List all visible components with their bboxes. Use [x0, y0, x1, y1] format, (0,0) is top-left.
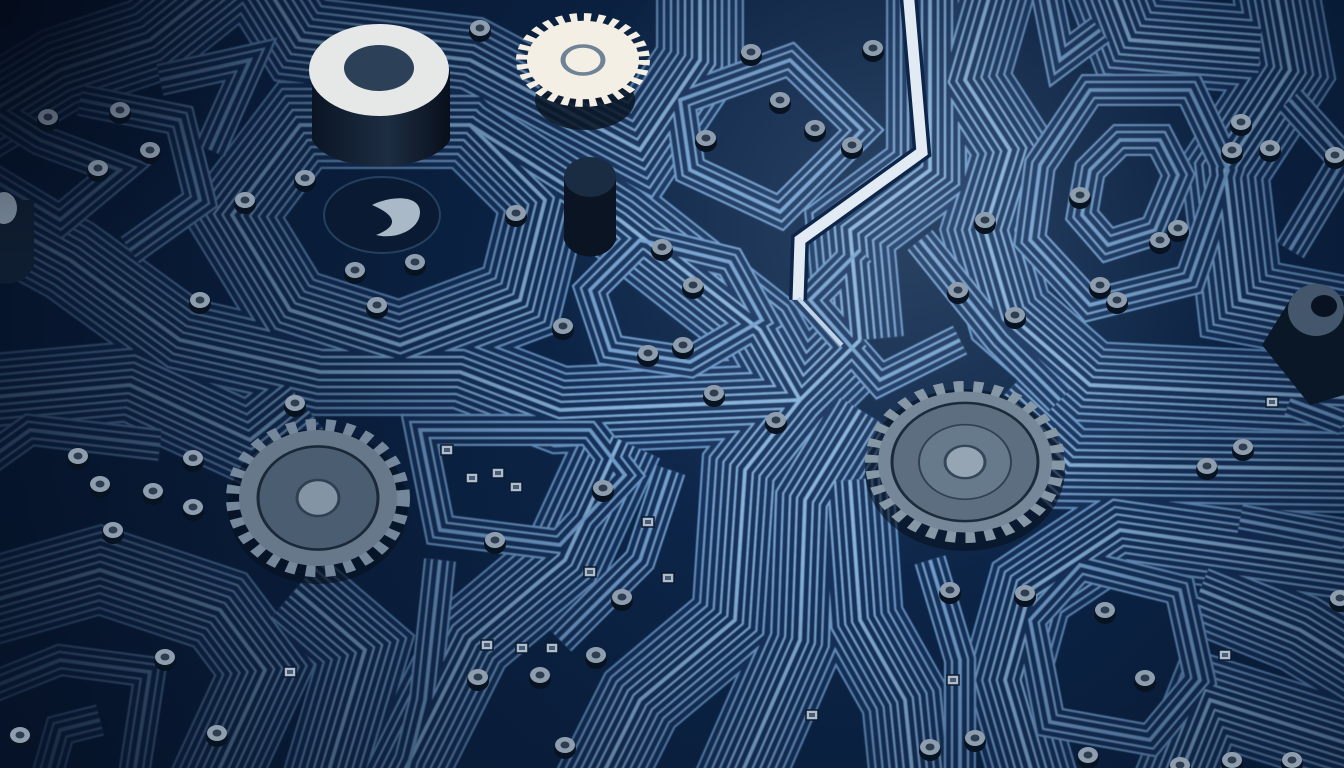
- recessed socket under large cylinder: [324, 177, 440, 253]
- large white cylinder: [309, 24, 450, 166]
- left gear: [228, 426, 408, 584]
- left edge cylinder: [0, 192, 34, 284]
- dark standing cylinder: [564, 157, 616, 256]
- right tube component: [1262, 284, 1344, 405]
- bright main trace: [798, 0, 922, 345]
- top white gear: [523, 18, 643, 130]
- right gear: [865, 387, 1065, 551]
- scattered small chips: [284, 397, 1278, 720]
